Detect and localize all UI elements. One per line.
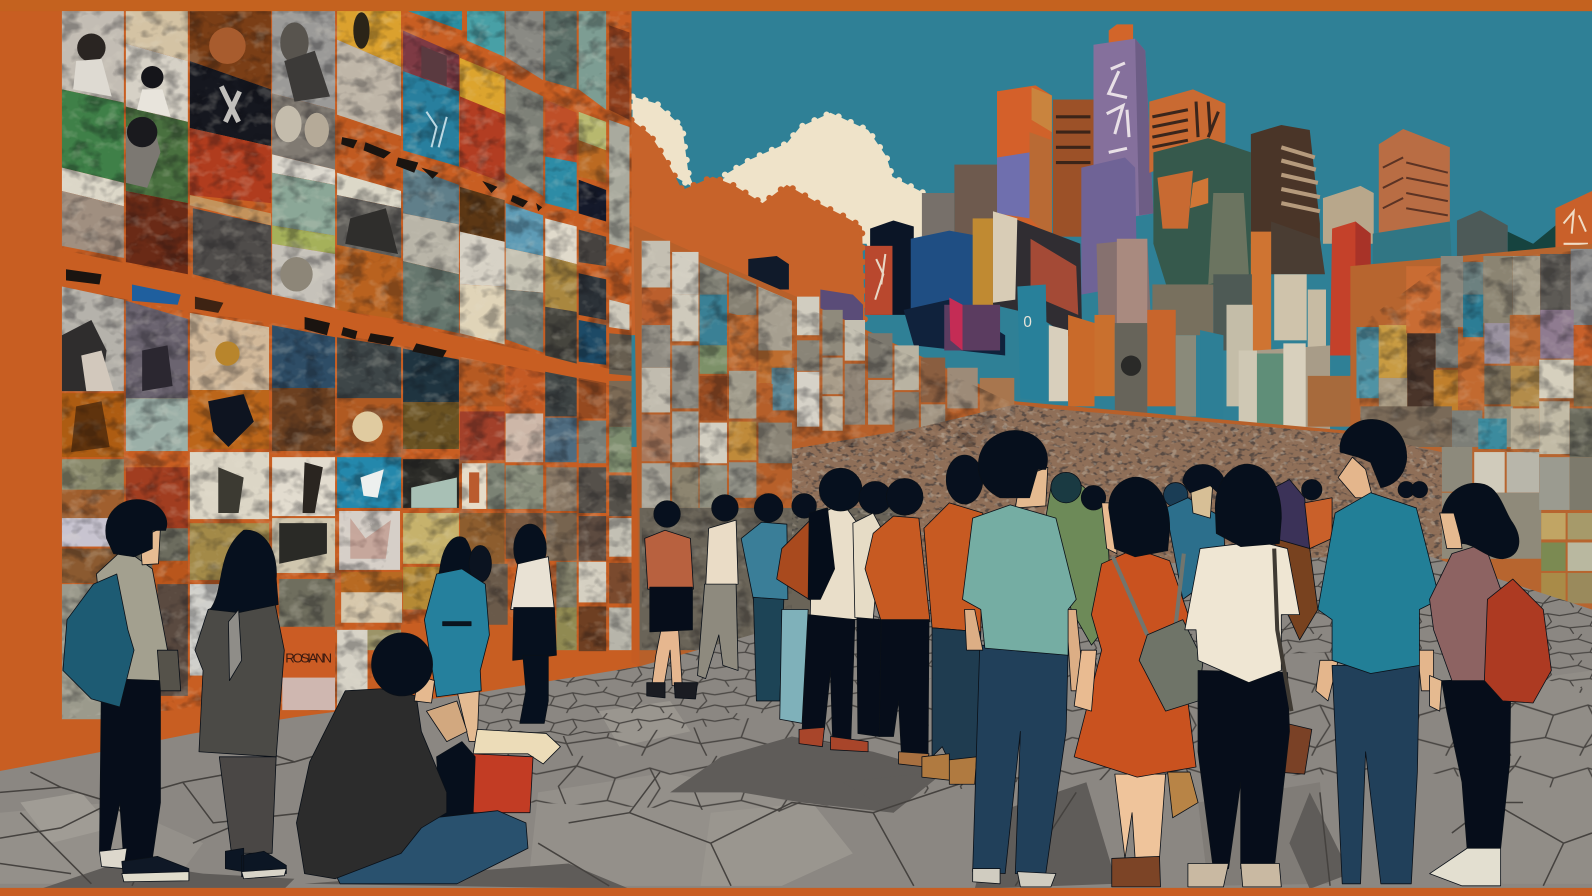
- orange band marks: [66, 137, 542, 358]
- right poster wall: [1350, 244, 1592, 610]
- seated man sketching: [296, 633, 560, 884]
- poster with word: ROSIANN: [285, 650, 332, 665]
- city skyline: [748, 24, 1592, 439]
- man in teal t-shirt: [963, 431, 1084, 887]
- left poster grid: lower band: [62, 286, 632, 719]
- man in orange shirt: [922, 455, 983, 784]
- left orange wall: [0, 0, 640, 771]
- man in blue shirt: [1316, 420, 1440, 884]
- woman in orange dress: [1074, 477, 1203, 887]
- poster with word: [274, 627, 335, 682]
- woman in dark coat: [195, 530, 286, 879]
- tower script marks: [1107, 63, 1129, 152]
- cobblestone floor: [0, 554, 1592, 889]
- bottom band: [0, 888, 1592, 896]
- left poster grid: upper band: [62, 11, 632, 376]
- poster figures and marks: [62, 12, 479, 710]
- man with orange bag: [777, 468, 868, 752]
- sky: [609, 0, 1592, 447]
- clouds: [632, 97, 924, 335]
- man with light trousers: [780, 494, 816, 723]
- receding wall paint texture: [642, 241, 1592, 657]
- crowd: distant figures: [645, 455, 1428, 784]
- poster paint texture: [62, 11, 633, 722]
- city skyline: 0: [1023, 314, 1032, 331]
- woman in blue dress: [424, 537, 491, 742]
- man in cream shirt: [698, 495, 738, 679]
- back crowd: [1046, 465, 1428, 645]
- woman in white top: [511, 524, 556, 723]
- receding poster wall: [634, 226, 1442, 666]
- man in blue shirt: [741, 494, 788, 701]
- woman with red backpack: [1430, 483, 1551, 886]
- man in orange jacket: [865, 478, 930, 767]
- top band: [0, 0, 1592, 11]
- woman in cream t-shirt: [1185, 464, 1312, 887]
- mosaic speckle: [792, 401, 1442, 574]
- man with teal backpack: [63, 500, 189, 882]
- woman in rust top: [645, 501, 698, 699]
- man in white shirt: [853, 482, 891, 737]
